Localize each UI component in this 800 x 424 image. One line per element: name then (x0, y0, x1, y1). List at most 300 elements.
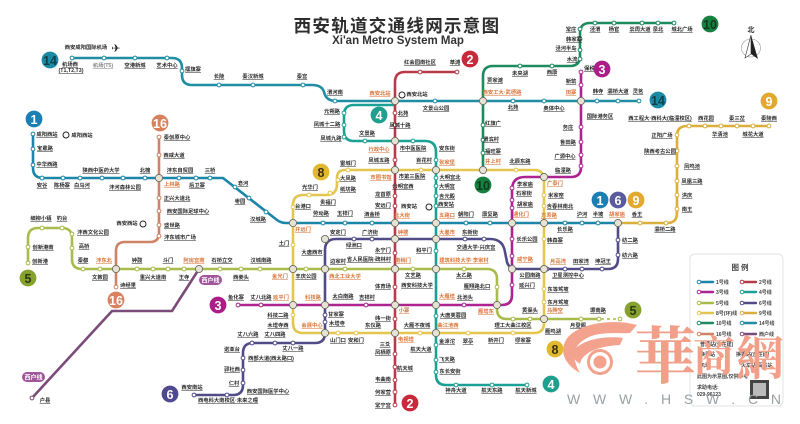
station labels: north and west: 北苑 (398, 109, 409, 117)
legend panel: 西户线 (759, 331, 774, 338)
station labels: east: 秦陵西 (761, 114, 778, 122)
station labels: north and west: 诗经里 (120, 281, 137, 289)
station labels: north and west: 艺术中心 (156, 61, 178, 69)
station labels: east: 西工程大·西科大(临潼校区) (628, 114, 692, 122)
station labels: central: 王寺 (179, 274, 190, 281)
station labels: east: 常庄 (566, 25, 577, 33)
station labels: central: 文教园 (92, 273, 108, 281)
station labels: central: 凤栖原 (375, 348, 392, 356)
station labels: north and west: 西咸大道 (163, 151, 185, 159)
number badges: 4 (376, 109, 383, 123)
station labels: central: 西安南站 (181, 383, 203, 391)
station labels: central: 丈八六路 (237, 330, 259, 338)
number badges: 5 (25, 272, 32, 286)
station labels: central: 诺亚台 (224, 345, 240, 353)
station labels: central: 航天新城 (515, 386, 537, 394)
station labels: north and west: 市中医医院 (400, 144, 427, 152)
station labels: east: 沪河 (577, 210, 588, 218)
station labels: north and west: 沣东自贸园 (167, 166, 193, 174)
station labels: north and west: 咸阳西站 (36, 130, 58, 138)
station labels: central: 木塔寺西 (267, 321, 289, 329)
station labels: central: 南稍门 (395, 256, 411, 264)
number badges: 2 (407, 397, 414, 411)
west hu line tags: 西户线 (24, 374, 43, 382)
station labels: central: 玉祥门 (337, 209, 353, 217)
station labels: central: 黄渠头 (522, 306, 539, 314)
station labels: central: 秦都 (78, 256, 89, 264)
station labels: east: 奥体中心 (543, 104, 565, 112)
station labels: central: 鱼化寨 (228, 293, 245, 301)
title: 西安轨道交通线网示意图 (294, 13, 500, 38)
station labels: north and west: 大明宫 (439, 182, 455, 190)
station labels: central: 西电科大南校区·未来之瞳 (198, 396, 259, 404)
station labels: north and west: 沣河森林公园 (109, 183, 141, 191)
station labels: central: 五路口 (439, 211, 455, 219)
station labels: north and west: 中华西路 (36, 160, 58, 168)
station labels: east: 纺二路 (622, 236, 639, 244)
legend panel: 2号线 (759, 279, 772, 286)
station labels: east: 含春林南北 (547, 202, 574, 210)
station labels: east: 红旗广 (485, 119, 501, 127)
number badges: 6 (615, 194, 622, 208)
station labels: north and west: 安远门 (375, 201, 391, 209)
station labels: north and west: 咸阳西站 (71, 131, 93, 139)
station labels: central: 西姜头 (233, 273, 250, 281)
line 4 (342, 105, 529, 387)
line 8 (291, 168, 546, 335)
station labels: east: 正阳广场 (651, 131, 673, 139)
number badges: 5 (630, 304, 637, 318)
station labels: north and west: 机场(T5) (93, 61, 113, 69)
station labels: east: 务庄 (563, 123, 574, 131)
station labels: central: 劳动路 (313, 209, 330, 217)
station labels: central: 三爻 (380, 341, 391, 348)
station labels: east: 石家街 (516, 189, 533, 197)
station labels: north and west: 大凤路 (340, 174, 357, 182)
station labels: north and west (30, 43, 461, 289)
station labels: east: 东月驾坡 (547, 298, 569, 306)
station labels: east: 城花大道 (742, 130, 764, 138)
station labels: east (483, 25, 778, 335)
station labels: central: 大唐芙蓉园 (440, 311, 466, 319)
station labels: central: 北池头 (457, 293, 474, 301)
station labels: east: 秦三岔 (729, 114, 746, 122)
station labels: north and west: 张家堡 (439, 158, 456, 166)
station labels: east: 凤凰三路 (681, 177, 703, 185)
station labels: north and west: 钓台 (57, 214, 67, 222)
legend panel: 普通站(含在建) (700, 341, 734, 348)
legend panel: 图 例 (731, 262, 749, 272)
station labels: central: 常宁宫 (375, 401, 391, 409)
station labels: east: 塬南路 (590, 306, 607, 314)
number badges: 3 (215, 299, 222, 313)
station labels: central: 丈八一路 (282, 344, 304, 352)
station labels: east: 渭滨村 (483, 135, 500, 143)
station labels: east: 月登阁 (570, 321, 586, 329)
station labels: central: 韦曲南 (375, 375, 391, 383)
watermark: brand characters: 華 (634, 307, 696, 396)
station labels: central (40, 209, 539, 409)
station labels: central: 小寨 (399, 306, 410, 314)
interchange stations (112, 97, 622, 337)
legend panel: 16号线 (716, 331, 732, 338)
station labels: north and west: 西安西站 (116, 219, 138, 227)
station labels: north and west: 台港口 (295, 202, 311, 210)
station labels: east: 卫星测控中心 (552, 271, 585, 279)
station labels: central: 阿房宫南 (183, 256, 205, 264)
station labels: north and west: 市图书馆 (370, 173, 392, 181)
station labels: central: 安和门 (348, 336, 364, 344)
station labels: north and west: 正兴大道北 (164, 194, 191, 202)
station labels: east: 灵茗 (633, 87, 643, 95)
legend panel: 换乘站 (700, 351, 715, 358)
station labels: east: 南王 (682, 205, 693, 213)
icon: north compass: 北 (748, 25, 754, 34)
station labels: central: 和平门 (416, 246, 432, 254)
station labels: east: 香王 (632, 210, 643, 218)
number badges: 8 (318, 166, 325, 180)
station labels: north and west: 后卫寨 (189, 181, 206, 189)
station labels: central: 新开门 (488, 336, 504, 344)
station labels: central: 吉祥村 (359, 293, 376, 301)
station labels: east: 坤冠王 (595, 257, 612, 265)
station labels: north and west: 北槐 (140, 166, 151, 174)
station labels: east: 崇周大道 (629, 25, 651, 33)
legend panel: 1号线 (716, 279, 729, 286)
station labels: central: 科技路 (305, 293, 322, 301)
station labels: central: 神舟大道 (445, 386, 467, 394)
station labels: north and west: 开远门 (295, 225, 311, 233)
station labels: north and west: 雷城门 (340, 159, 356, 167)
line 16 (114, 135, 161, 289)
station labels: north and west: 上林路 (164, 180, 181, 188)
station labels: central: 东新街 (462, 228, 479, 236)
station labels: central: 电视塔 (398, 335, 415, 343)
station labels: east: 泾河半岛 (555, 44, 577, 52)
station labels: east: 西康 (547, 68, 558, 76)
station labels: central: 缪家寨 (515, 336, 532, 344)
station labels: central: 西安科技大学 (401, 281, 434, 289)
station labels: central: 雁翔路北口 (464, 282, 490, 290)
station labels: east: 纺六路 (622, 251, 639, 259)
station labels: north and west: 沣西文化公园 (77, 228, 109, 236)
station labels: central: 西北工业大学 (329, 272, 362, 280)
station labels: central: 汉城南路 (250, 256, 272, 264)
station labels: east: 延兴门 (519, 281, 535, 289)
station labels: central: 东仪路 (365, 321, 382, 329)
station labels: north and west: 沣东城市广场 (164, 233, 197, 241)
number badges: 10 (476, 179, 490, 193)
station labels: central: 飞天路 (439, 355, 456, 363)
number badges: 6 (167, 388, 174, 402)
number badges: 3 (599, 63, 606, 77)
station labels: north and west: 安谷 (37, 181, 48, 189)
station labels: east: 未央湖 (512, 69, 528, 77)
line 10 (481, 21, 676, 170)
station labels: east: 城北广场 (671, 25, 693, 33)
legend panel: 8号(环)线 (716, 310, 737, 317)
station labels: north and west: 西安站 (401, 202, 418, 210)
station labels: east: 韩寺 (593, 87, 604, 95)
station labels: north and west: 凤城十路 (389, 121, 411, 129)
legend panel: 机场 (700, 362, 710, 369)
watermark logo (563, 322, 637, 375)
station labels: central: 金光门 (272, 272, 288, 280)
station labels: east: 胡家庙 (517, 200, 534, 208)
station labels: north and west: 汉城路 (250, 215, 267, 223)
station labels: central: 广济街 (362, 228, 379, 236)
station labels: central: 边家村 (330, 257, 347, 265)
station labels: east: 临潼路 (555, 166, 572, 174)
legend panel: 5号线 (716, 300, 729, 307)
station labels: north and west: 高桥 (79, 242, 90, 250)
legend panel: 火车站/高铁站 (741, 362, 772, 369)
west hu line (30, 269, 199, 400)
station labels: north and west: 纸坊路 (340, 185, 357, 193)
station labels: central: 太乙路 (456, 271, 473, 279)
number badges: 9 (633, 194, 640, 208)
station labels: east: 东等驾坡 (547, 285, 569, 293)
legend panel: 6号线 (759, 300, 772, 307)
station labels: north and west: 枣园 (235, 197, 245, 205)
watermark: brand characters: 網 (736, 320, 784, 389)
station labels: north and west: 行政中心 (368, 145, 390, 153)
station labels: north and west: 市第三医院 (399, 172, 426, 180)
station labels: central: 航天城 (397, 364, 414, 372)
station labels: north and west: 机场西 (62, 60, 79, 68)
station labels: east: 杨官 (609, 25, 619, 33)
line 9 (618, 124, 771, 225)
legend panel: 4号线 (759, 289, 772, 296)
station labels: east: 灞桥大道 (607, 87, 629, 95)
station labels: central: 朝阳门 (458, 210, 474, 218)
station labels: north and west: 文景路 (359, 129, 376, 137)
station labels: east: 北辰东路 (509, 157, 531, 165)
station labels: north and west: 渭河南 (327, 88, 343, 96)
station labels: north and west: 宝鼎路 (37, 144, 54, 152)
station labels: north and west: 凤城十二路 (314, 120, 341, 128)
station labels: east: 华清池 (712, 130, 729, 138)
station labels: central: 东长安街 (439, 367, 461, 375)
station labels: central: 西安国际医学中心 (247, 387, 290, 395)
station labels: north and west: 红会园南社区 (404, 58, 437, 66)
watermark: brand characters (634, 307, 784, 396)
station labels: central: 会展中心 (301, 321, 323, 329)
station labels: north and west: 摆旗寨 (185, 65, 202, 73)
station labels: central: 大差市 (439, 228, 456, 236)
station labels: north and west: 三桥 (205, 166, 216, 174)
number badges: 10 (703, 18, 717, 32)
station labels: north and west: 创新港南 (32, 243, 54, 251)
station labels: north and west: 文景山公园 (423, 104, 449, 112)
station labels: central: 绿洲口 (346, 241, 362, 249)
station labels: north and west: 大明宫西 (392, 182, 414, 190)
station labels: east: 半坡 (593, 210, 604, 218)
station labels: east: 李家庙 (517, 180, 534, 188)
station labels: east: 万寿路 (541, 211, 558, 219)
west hu line tags (22, 275, 222, 382)
station labels: central: 石桥立交 (211, 256, 233, 264)
legend panel: 求助电话: (697, 384, 719, 391)
station labels: central: 航天东路 (481, 386, 503, 394)
station labels: east: 广源中心 (554, 152, 576, 160)
station labels: central: 丰庆公园 (295, 272, 317, 280)
station labels: central: 户县 (40, 396, 51, 404)
station labels: east: 咸宁路 (517, 255, 534, 263)
station labels: north and west: 百花村 (416, 156, 433, 164)
station labels: central: 雁塔东 (478, 307, 495, 315)
station labels: central: 体育场 (375, 282, 392, 290)
station labels: central: 郭杜西 (224, 365, 241, 373)
station labels: north and west: 大唐西市 (301, 248, 323, 256)
number badges: 14 (651, 94, 665, 108)
station labels: central: 太白南路 (332, 292, 354, 300)
line 3 (236, 70, 583, 307)
station labels: east: 公园南路 (519, 271, 541, 279)
station labels: north and west: 长陵 (214, 72, 225, 80)
station labels: central: 永宁门 (375, 246, 391, 254)
station labels: central: 交通大学·兴庆宫 (457, 243, 495, 251)
station labels: east: 贾家滩 (487, 76, 504, 84)
station labels: central: 北大街 (394, 211, 411, 219)
number badges: 14 (43, 54, 57, 68)
station labels: central: 甘家寨 (328, 310, 345, 318)
station labels: central: 纬一街 (375, 314, 392, 322)
station labels: central: 何家营 (375, 388, 391, 396)
station labels: east: 凤鸣池 (684, 162, 701, 170)
station labels: north and west: 西安站 (438, 200, 455, 208)
station labels: east: 西安工大·武德路 (483, 88, 522, 96)
station labels: north and west: 西安国际足球中心 (167, 207, 210, 215)
station labels: north and west: 陈杨寨 (54, 181, 71, 189)
station labels: east: 广泰门 (547, 179, 563, 187)
number badges: 9 (766, 95, 773, 109)
station labels: central: 丈八北路 (250, 293, 272, 301)
station labels: central: 木塔寺 (329, 319, 346, 327)
legend panel: 10号线 (716, 320, 732, 327)
station labels: central: 翠亭 (463, 337, 474, 345)
west hu line tags: 西户线 (201, 276, 220, 284)
number badges: 1 (597, 194, 604, 208)
subtitle: Xi'an Metro System Map (332, 35, 464, 47)
station labels: north and west: 空港新城 (124, 61, 146, 69)
station labels: north and west: 秦宫 (297, 72, 307, 80)
station labels: east: 西花园 (698, 114, 714, 122)
station labels: central: 航天大道 (410, 345, 432, 353)
station labels: east: 井上村 (485, 157, 502, 165)
station labels: east: 陕西考古公园 (644, 147, 676, 155)
station labels: east: 水流 (567, 55, 578, 63)
station labels: central: 大雁不夜城 (404, 321, 431, 329)
station labels: central: 钟楼 (398, 228, 409, 236)
station labels: north and west: 含元殿 (439, 192, 456, 200)
icon: north compass (742, 25, 760, 59)
station labels: east: 月亮湾 (550, 257, 567, 265)
number badges: 16 (109, 294, 123, 308)
legend panel: 14号线 (759, 320, 775, 327)
station labels: north and west: 土门 (279, 239, 289, 247)
station labels: east: 米家窑 (548, 191, 564, 199)
station labels: east: 韩森寨 (547, 236, 564, 244)
station labels: east: 国际港务区 (587, 112, 614, 120)
number badges: 1 (31, 113, 38, 127)
line 1 (31, 132, 618, 225)
station labels: east: 胡家庙 (609, 210, 626, 218)
station labels: north and west: (T1,T2,T3) (58, 68, 84, 74)
station labels: central: 沣东北 (96, 256, 113, 264)
station labels: north and west: 凤城五路 (368, 156, 390, 164)
station labels: east: 长乐公园 (516, 235, 538, 243)
station labels: central: 钟鼓 (132, 256, 143, 264)
station labels: central: 西部大道(西太路口) (248, 354, 294, 362)
station labels: north and west: 龙首原 (375, 190, 392, 198)
legend panel (690, 254, 783, 406)
station labels: north and west: 陕西中医药大学 (82, 166, 120, 174)
station labels: central: 洒金桥 (364, 210, 381, 218)
line 2 (393, 70, 459, 407)
station labels: central: 理工大曲江校区 (494, 321, 532, 329)
legend panel: 9号线 (759, 310, 772, 317)
station labels: north and west: 大明宫北 (439, 173, 461, 181)
station labels: central: 省人民医院·碑林村 (347, 255, 392, 263)
station labels: central: 安定门 (330, 228, 346, 236)
station labels: north and west: 秦创原中心 (164, 133, 191, 141)
station labels: central: 金滹沱 (439, 337, 456, 345)
number badges: 4 (548, 378, 555, 392)
station labels: east: 田家湾 (573, 257, 590, 265)
station labels: east: 鲁田路 (560, 138, 577, 146)
station labels: east: 福旺寨 (485, 147, 502, 155)
station labels: central: 文艺路 (405, 271, 422, 279)
line 14 (70, 56, 641, 103)
station labels: central: 斗门 (163, 256, 173, 264)
station labels: central: 重兴大道南 (140, 273, 166, 281)
station labels: east: 韩家寨 (566, 35, 583, 43)
legend panel: 换乘站(含在建) (736, 351, 770, 358)
station labels: central: 科技二路 (267, 311, 289, 319)
station labels: central: 山门口 (330, 336, 346, 344)
number badges: 2 (467, 53, 474, 67)
station labels: east: 泾渭 (590, 25, 600, 33)
station labels: east: 北苑 (508, 103, 519, 111)
station labels: north and west: 皂河 (238, 179, 249, 187)
station labels: east: 西安东站 (606, 321, 628, 329)
station labels: north and west: 贵福门 (320, 198, 336, 206)
station labels: east: 新筑 (566, 77, 577, 85)
station labels: north and west: 西安咸阳国际机场 (65, 43, 108, 51)
station labels: north and west: 元朔路 (324, 107, 341, 115)
station labels: north and west: 秦汉新城 (242, 72, 264, 80)
station labels: east: 洪庆 (682, 191, 693, 199)
station labels: east: 马腾空 (547, 306, 563, 314)
watermark: site address: WWW.HSW.CN (567, 391, 781, 407)
station labels: north and west: 白马河 (74, 181, 91, 189)
station labels: north and west: 光华门 (302, 183, 318, 191)
station labels: north and west: 细柳小镇 (30, 214, 52, 222)
station labels: central: 曲江池西 (437, 321, 459, 329)
station labels: central: 大雁塔 (439, 292, 456, 300)
station labels: north and west: 西安北站 (406, 90, 428, 98)
number badges: 8 (552, 343, 559, 357)
station labels: east: 田寨 (566, 88, 577, 96)
icon: railway stations (63, 92, 432, 227)
station labels: east: 泉北 (653, 25, 664, 33)
legend panel: 029-96123 (697, 392, 721, 398)
station labels: east: 保税区 (584, 64, 601, 72)
station labels: north and west: 草滩 (450, 58, 461, 66)
station labels: central: 建筑科技大学·李家村 (439, 256, 489, 264)
station labels: central: 仁村 (229, 379, 240, 387)
